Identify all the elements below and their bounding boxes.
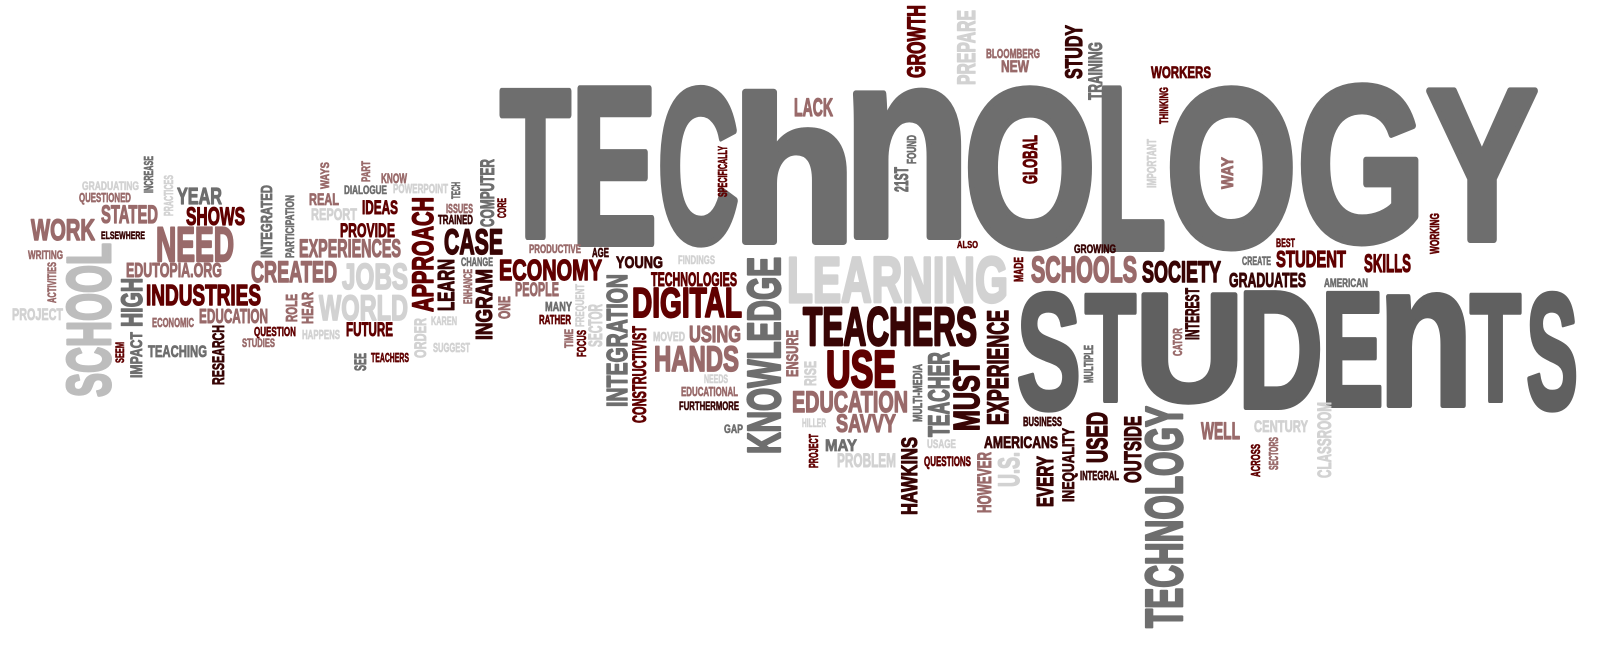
word: trained: TRAINED [438,212,473,227]
word: use: USE [826,341,896,399]
word: jobs: JOBS [342,256,408,297]
word: question: QUESTION [254,324,296,339]
word: issues: ISSUES [446,201,473,216]
word: high: HIGH [116,278,149,327]
word: students (second largest): S [1017,260,1081,444]
word: workers: WORKERS [1151,63,1211,82]
word: century: CENTURY [1254,417,1308,436]
word: role: ROLE [284,294,301,322]
word: students (second largest): E [1321,258,1384,440]
word: well: WELL [1201,418,1240,445]
word: experiences: EXPERIENCES [299,235,401,263]
word: graduates: GRADUATES [1229,270,1306,292]
word: students (second largest): D [1238,258,1323,444]
word: dialogue: DIALOGUE [344,183,387,197]
word: computer: COMPUTER [478,159,499,227]
word: sector: SECTOR [586,304,607,347]
word: technology (largest): O [964,42,1096,294]
word: seem: SEEM [113,342,127,363]
word: inequality: INEQUALITY [1059,428,1078,502]
word: working: WORKING [1427,213,1442,254]
word: create: CREATE [1242,254,1271,268]
word: ways: WAYS [318,162,332,189]
word: 21st: 21ST [892,167,913,192]
word: gap: GAP [724,422,743,436]
word: cator: CATOR [1170,328,1185,356]
word: happens: HAPPENS [302,327,340,342]
word: savvy: SAVVY [836,410,896,438]
word: needs: NEEDS [704,372,728,386]
word: many: MANY [545,299,572,314]
word: ingram: INGRAM [471,269,497,340]
word: stated: STATED [101,201,158,229]
word: outside: OUTSIDE [1120,416,1147,483]
word: furthermore: FURTHERMORE [679,399,739,413]
word: learn: LEARN [433,259,459,311]
word: multi-media: MULTI-MEDIA [910,364,925,422]
word: best: BEST [1276,236,1295,250]
word: participation: PARTICIPATION [283,195,297,258]
word: sectors: SECTORS [1266,437,1281,470]
word: problem: PROBLEM [837,451,896,472]
word: focus: FOCUS [574,330,589,357]
word: tech: TECH [449,182,463,199]
word: real: REAL [309,190,339,209]
word: made: MADE [1011,257,1026,282]
word: need: NEED [156,219,234,272]
word: lack: LACK [794,94,833,122]
word: way: WAY [1218,156,1237,189]
word: u.s.: U.S. [993,452,1026,487]
word: time: TIME [562,329,576,348]
word: hear: HEAR [300,292,317,324]
word: digital: DIGITAL [632,279,742,326]
word: graduating: GRADUATING [82,179,139,193]
word: rather: RATHER [539,312,571,327]
word: questions: QUESTIONS [924,453,971,469]
word: students (second largest): T [1085,262,1136,434]
word: report: REPORT [311,205,357,224]
word: writing: WRITING [28,248,63,262]
word: may: MAY [825,436,858,455]
word: technology (largest): T [500,46,571,282]
word: change: CHANGE [461,255,493,269]
word: study: STUDY [1061,25,1088,79]
word: interest: INTEREST [1183,288,1204,340]
word: approach: APPROACH [407,197,440,312]
word: moved: MOVED [653,329,685,344]
word: practices: PRACTICES [161,175,176,216]
word: thinking: THINKING [1157,87,1171,124]
word: world: WORLD [319,289,408,328]
word: constructivist: CONSTRUCTIVIST [630,326,651,423]
word: shows: SHOWS [186,203,245,231]
word: technology (largest): Y [1426,44,1538,286]
word: skills: SKILLS [1364,250,1411,278]
word: teachers: TEACHERS [803,297,977,357]
word: multiple: MULTIPLE [1081,345,1096,383]
word: students (second largest): T [1470,262,1521,434]
word: enhance: ENHANCE [461,269,475,304]
word: schools: SCHOOLS [1031,249,1137,290]
word: important: IMPORTANT [1144,139,1159,188]
word: educational: EDUCATIONAL [681,384,738,399]
word: bloomberg: BLOOMBERG [986,46,1040,61]
word: age: AGE [592,245,609,260]
word: must: MUST [946,360,987,431]
word: specifically: SPECIFICALLY [715,146,730,197]
word: technology (largest): h [731,56,856,286]
word: growing: GROWING [1074,242,1116,256]
word: powerpoint: POWERPOINT [393,181,448,196]
word: new: NEW [1001,57,1030,76]
word: using: USING [689,321,741,347]
word: integrated: INTEGRATED [259,185,276,258]
word: activities: ACTIVITIES [45,262,59,303]
word: student: STUDENT [1276,246,1346,272]
word: order: ORDER [411,318,430,358]
word: core: CORE [495,198,509,218]
word: part: PART [359,161,373,182]
word: ideas: IDEAS [362,198,398,219]
word: technology (largest): E [571,40,657,292]
word: knowledge: KNOWLEDGE [738,257,790,454]
word: project: PROJECT [12,305,63,324]
word: hands: HANDS [654,340,739,379]
word: teachers small: TEACHERS [371,350,409,365]
word: also: ALSO [957,240,978,251]
word: found: FOUND [904,135,919,164]
word: students (second largest): U [1135,262,1244,434]
word: usage: USAGE [927,437,956,451]
word: students (second largest): n [1378,220,1474,450]
word: global: GLOBAL [1020,135,1042,184]
word: technologies: TECHNOLOGIES [651,270,737,291]
word: people: PEOPLE [515,280,559,301]
word: economy: ECONOMY [499,255,602,287]
word: see: SEE [351,353,370,371]
word: teaching: TEACHING [148,342,207,361]
word: created: CREATED [251,256,337,289]
word: hawkins: HAWKINS [897,437,922,515]
word: technology (largest): G [1297,41,1426,289]
word: findings: FINDINGS [678,253,715,267]
word: year: YEAR [177,183,222,209]
word: american: AMERICAN [1324,276,1368,290]
word: technology (largest): C [657,43,739,289]
word: technology (largest): O [1166,42,1297,294]
word: across: ACROSS [1248,444,1263,477]
word: karen: KAREN [431,314,457,328]
word: industries: INDUSTRIES [146,280,261,312]
word: every: EVERY [1032,456,1058,507]
word: economic: ECONOMIC [152,315,194,330]
word: elsewhere: ELSEWHERE [101,230,145,242]
word: technology vertical: TECHNOLOGY [1136,406,1194,628]
word: school: SCHOOL [55,243,123,397]
word: ensure: ENSURE [783,330,802,377]
word: frequent: FREQUENT [573,284,587,327]
word: however: HOWEVER [975,452,996,513]
word: integration: INTEGRATION [602,274,634,407]
word: increase: INCREASE [141,156,156,193]
word: training: TRAINING [1086,42,1107,100]
word: case: CASE [444,223,503,262]
word: used: USED [1082,412,1114,463]
word: experience: EXPERIENCE [982,310,1015,425]
word: education large: EDUCATION [792,386,908,419]
word: work: WORK [31,214,95,247]
word: future: FUTURE [346,320,393,341]
word: teacher: TEACHER [923,352,956,437]
word: suggest: SUGGEST [433,340,470,355]
word: project small: PROJECT [806,434,821,468]
word: rise: RISE [801,361,820,386]
word: productive: PRODUCTIVE [529,242,581,256]
word: integral: INTEGRAL [1080,468,1119,483]
word: provide: PROVIDE [340,221,395,242]
word: young: YOUNG [616,253,663,272]
word: learning: LEARNING [787,244,1008,316]
word: know: KNOW [381,170,407,186]
word: society: SOCIETY [1142,256,1221,289]
word: one: ONE [495,296,514,319]
word: studies: STUDIES [242,336,275,350]
word: classroom: CLASSROOM [1315,402,1336,478]
word: technology (largest): L [1096,40,1166,298]
word: research: RESEARCH [209,325,228,385]
word: impact: IMPACT [127,332,146,378]
word: business: BUSINESS [1023,414,1062,429]
word: education small: EDUCATION [199,306,268,328]
word: technology (largest): n [842,0,972,294]
word: edutopia.org: EDUTOPIA.ORG [126,260,222,282]
word: americans: AMERICANS [984,433,1058,452]
word: hiller: HILLER [802,416,826,430]
word: questioned: QUESTIONED [79,190,131,205]
